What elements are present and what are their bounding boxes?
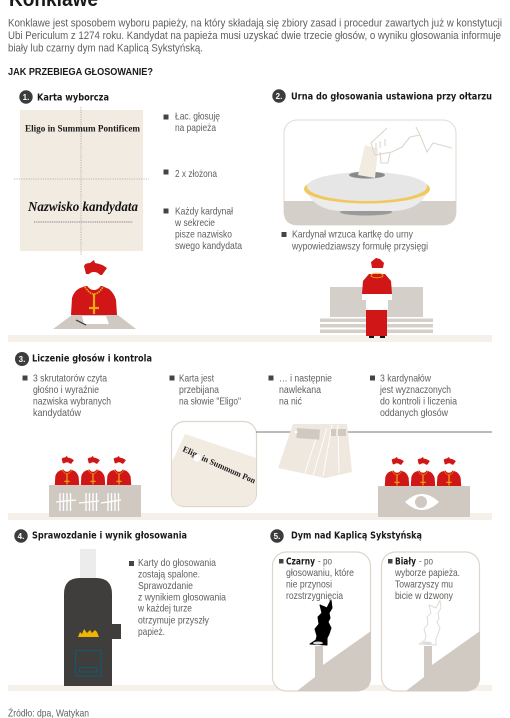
urn note: wypowiedziawszy formułę przysięgi	[291, 240, 428, 252]
ballot notes: Każdy kardynał	[175, 206, 234, 218]
report note: papież.	[138, 626, 165, 638]
panel: black smoke: rozstrzygnięcia	[286, 590, 343, 602]
ballot notes: w sekrecie	[174, 217, 215, 229]
panel: step 4 report	[14, 529, 226, 686]
report note: zostają spalone.	[138, 568, 200, 580]
panel: white smoke: Towarzyszy mu	[395, 578, 453, 590]
ballot notes: swego kandydata	[175, 240, 242, 252]
urn illustration	[284, 120, 456, 225]
panel: step 5 smoke	[270, 529, 480, 691]
report note: Karty do głosowania	[138, 557, 216, 569]
pierced ballot card: in Summum Pon	[200, 453, 257, 486]
note: three controllers: oddanych głosów	[380, 407, 448, 419]
step 5 heading: Dym nad Kaplicą Sykstyńską	[291, 530, 422, 542]
ballot notes: Łac. głosuję	[175, 110, 220, 122]
note: pierced ballot: Karta jest	[179, 372, 214, 384]
panel: step 2 urn	[272, 89, 492, 338]
ballot notes: na papieża	[175, 122, 216, 134]
ground band: bottom row	[8, 685, 492, 691]
intro text	[8, 18, 502, 54]
step 5 heading: 5.	[274, 532, 280, 541]
step 1 heading: Karta wyborcza	[37, 92, 109, 104]
step 1 heading: 1.	[23, 93, 29, 102]
panel: black smoke: Czarny	[286, 556, 315, 568]
cardinal writing at table	[53, 260, 136, 329]
report note: Sprawozdanie	[138, 580, 193, 592]
report note: w każdej turze	[137, 602, 192, 614]
ballot card: Nazwisko kandydata	[27, 200, 138, 215]
panel: white smoke	[382, 552, 480, 691]
cardinal from behind	[362, 258, 392, 338]
step 4 heading	[14, 529, 187, 543]
panel: white smoke: bicie w dzwony	[395, 590, 454, 602]
step 4 heading: Sprawozdanie i wynik głosowania	[32, 530, 187, 542]
note: pierced ballot: na słowie "Eligo"	[179, 396, 241, 408]
note: pierced ballot: przebijana	[179, 384, 219, 396]
step 3 heading: 3.	[19, 355, 25, 364]
thread with ballots	[256, 424, 492, 478]
report note: otrzymuje przyszły	[138, 614, 210, 626]
report note: z wynikiem głosowania	[138, 592, 226, 604]
ground band: middle row	[8, 513, 492, 520]
note: three controllers: jest wyznaczonych	[379, 384, 451, 396]
note: threaded: nawlekana	[279, 384, 321, 396]
intro text: biały lub czarny dym nad Kaplicą Sykstyńską.	[8, 42, 203, 54]
note: threaded: … i następnie	[279, 372, 332, 384]
section heading: JAK PRZEBIEGA GŁOSOWANIE?	[8, 66, 153, 78]
ballot notes: pisze nazwisko	[175, 228, 232, 240]
pierced ballot card: Elig	[181, 444, 200, 459]
note: three controllers: do kontroli i liczenia	[380, 396, 457, 408]
panel: white smoke: wyborze papieża.	[394, 567, 460, 579]
note: threaded	[268, 372, 332, 408]
note: scrutineers: 3 skrutatorów czyta	[33, 372, 107, 384]
pierced ballot card	[172, 422, 257, 506]
note: threaded: na nić	[279, 396, 302, 408]
stove	[64, 549, 121, 686]
controllers with eye	[378, 457, 470, 517]
report note	[129, 557, 226, 638]
step 3 heading: Liczenie głosów i kontrola	[32, 352, 152, 364]
panel: black smoke	[272, 552, 371, 691]
note: three controllers	[370, 372, 457, 419]
panel: black smoke: - po	[318, 556, 332, 568]
note: pierced ballot	[170, 372, 241, 408]
ground band: top row	[8, 335, 492, 342]
step 3 heading	[15, 352, 152, 366]
note: scrutineers: głośno i wyraźnie	[33, 384, 99, 396]
step 2 heading: 2.	[276, 92, 282, 101]
note: three controllers: 3 kardynałów	[380, 372, 431, 384]
panel: black smoke: nie przynosi	[286, 578, 332, 590]
panel: black smoke: głosowaniu, które	[286, 567, 354, 579]
scrutineers with tally	[49, 456, 141, 517]
panel: step 3 counting	[15, 352, 492, 517]
note: scrutineers	[22, 372, 111, 419]
note: scrutineers: kandydatów	[33, 407, 81, 419]
altar with steps	[320, 287, 433, 333]
step 5 heading	[270, 529, 422, 543]
ballot card: Eligo in Summum Pontificem	[25, 124, 140, 134]
panel: white smoke: - po	[419, 556, 433, 568]
urn note: Kardynał wrzuca kartkę do urny	[292, 228, 414, 240]
urn note	[282, 228, 428, 252]
panel: white smoke: Biały	[395, 556, 416, 568]
step 1 heading	[19, 90, 109, 104]
panel: step 1 ballot	[14, 90, 242, 329]
ballot card	[14, 107, 149, 255]
ballot notes	[164, 110, 242, 252]
note: scrutineers: nazwiska wybranych	[33, 396, 111, 408]
step 4 heading: 4.	[18, 532, 24, 541]
ballot notes: 2 x złożona	[175, 168, 217, 180]
